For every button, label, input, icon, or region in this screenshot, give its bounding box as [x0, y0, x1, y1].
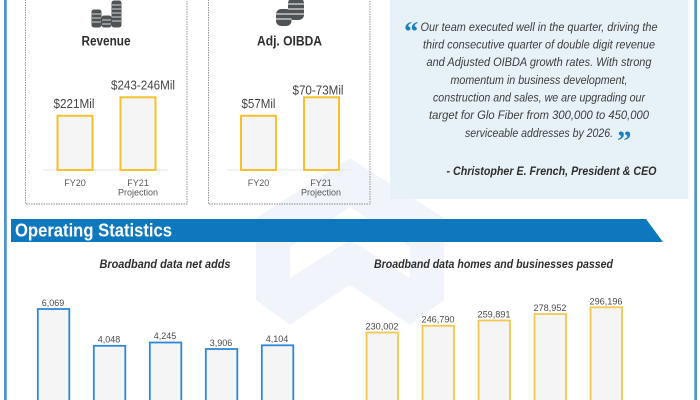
panel: CEO quote	[390, 0, 688, 199]
watermark logo	[256, 158, 444, 325]
axis	[43, 169, 168, 171]
chart: broadband data net adds	[38, 257, 293, 400]
values: 259,891	[478, 310, 510, 320]
values: 3,906	[210, 338, 232, 348]
value: $57Mil: $57Mil	[242, 97, 276, 111]
quote attribution: - Christopher E. French, President & CEO	[446, 164, 657, 178]
values: 230,002	[366, 322, 398, 332]
heading: revenue: Revenue	[82, 34, 131, 48]
quote text: construction and sales, we are upgrading our	[433, 90, 646, 104]
heading: adj. OIBDA: Adj. OIBDA	[257, 34, 322, 48]
label: FY21 Projection: FY21	[127, 178, 149, 188]
values: 6,069	[42, 298, 64, 308]
values: 4,048	[98, 334, 120, 344]
quote text: third consecutive quarter of double digit revenue	[423, 38, 655, 52]
label: FY20: FY20	[64, 178, 86, 188]
quote text: serviceable addresses by 2026.	[465, 126, 613, 140]
values: 246,790	[422, 314, 454, 324]
panel: revenue	[26, 0, 187, 204]
label: FY21 Projection: Projection	[301, 188, 341, 198]
label: FY21 Projection: Projection	[118, 188, 158, 198]
bars	[366, 307, 622, 400]
value: $221Mil: $221Mil	[54, 97, 94, 111]
values: 278,952	[534, 303, 566, 313]
icon: coin stacks	[92, 0, 122, 28]
bar: FY20 OIBDA	[241, 116, 276, 170]
quote text	[420, 20, 658, 140]
panel: adj. OIBDA	[208, 0, 370, 204]
values: 4,245	[154, 331, 176, 341]
icon: coins	[276, 0, 304, 26]
chart title: Broadband data net adds	[100, 257, 231, 271]
closing quote mark: ”	[617, 126, 632, 158]
chart title: Broadband data homes and businesses passed	[374, 257, 613, 271]
values: 296,196	[590, 296, 622, 306]
values	[42, 298, 288, 348]
banner: operating statistics	[11, 219, 663, 242]
label: FY20: FY20	[248, 178, 269, 188]
banner: operating statistics: Operating Statistics	[15, 220, 172, 240]
quote text: and Adjusted OIBDA growth rates. With strong	[426, 55, 652, 69]
bar: FY20 revenue	[58, 116, 92, 170]
value: $70-73Mil: $70-73Mil	[292, 84, 344, 98]
bar: FY21 revenue	[120, 97, 156, 170]
opening quote mark: “	[404, 16, 418, 48]
quote text: momentum in business development,	[450, 73, 628, 87]
values: 4,104	[266, 334, 288, 344]
bars	[38, 309, 293, 400]
value: $243-246Mil: $243-246Mil	[111, 78, 175, 92]
values	[366, 296, 622, 332]
axis	[227, 169, 352, 171]
quote text: target for Glo Fiber from 300,000 to 450,000	[429, 108, 649, 122]
chart: broadband data homes and businesses passed	[366, 257, 622, 400]
quote text: Our team executed well in the quarter, driving the	[420, 20, 658, 34]
bar: FY21 OIBDA	[304, 97, 339, 170]
label: FY21 Projection: FY21	[310, 178, 332, 188]
